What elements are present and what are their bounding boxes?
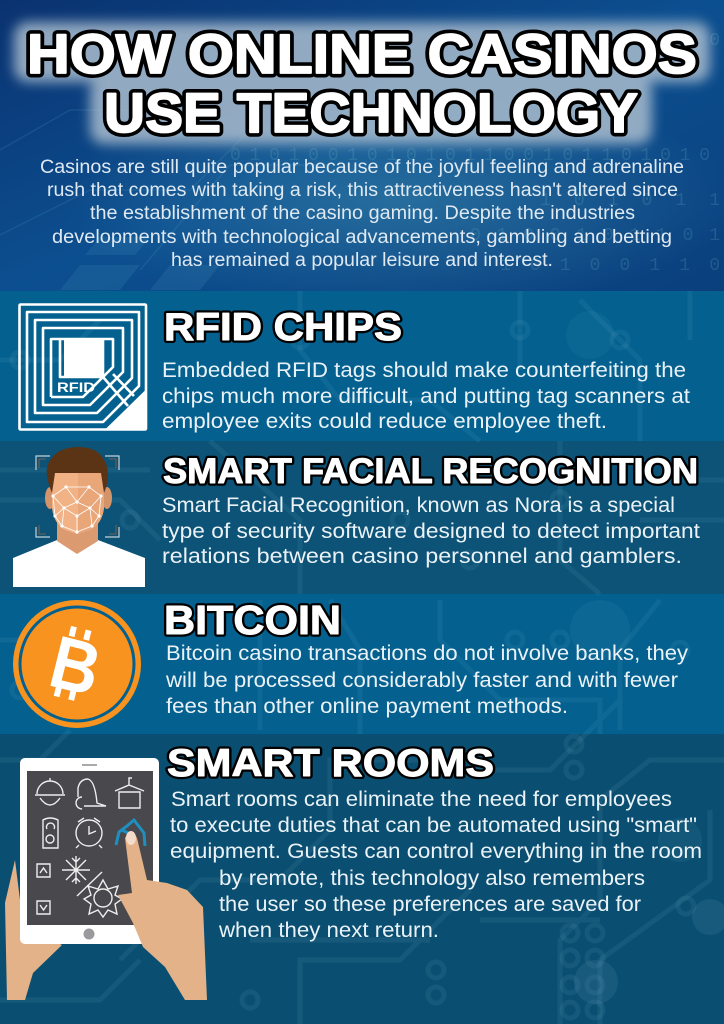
RFID text [162,359,690,433]
band: facial recognition [0,441,724,594]
band: smart rooms [0,734,724,1024]
title: USE TECHNOLOGY [104,81,638,144]
header background: 0 1 0 0 1 0 1 1 0 1 [470,226,720,246]
intro text: has remained a popular leisure and interest. [171,250,553,271]
app icons: up and down [37,864,50,914]
header background: 0101001010101100101101010 [230,146,710,166]
left hand [5,860,62,1000]
icon: tablet with hands [5,758,207,1000]
title [14,22,710,144]
facial recognition text: type of security software designed to detect important [162,520,700,543]
smart rooms heading: SMART ROOMS [167,742,494,785]
RFID text: chips much more difficult, and putting tag scanners at [162,385,690,408]
smart rooms text: Smart rooms can eliminate the need for employees [171,788,672,811]
app icon: clock [76,820,102,846]
facial recognition heading: SMART FACIAL RECOGNITION [163,452,698,491]
icon: RFID tag: RFID [57,380,95,395]
title: HOW ONLINE CASINOS [27,22,697,85]
app icon: sun [94,889,112,907]
circuit pattern [0,291,724,1024]
RFID heading: RFID CHIPS [164,306,402,349]
header background: 1 0 1 0 [600,31,720,51]
bitcoin heading: BITCOIN [164,597,341,643]
RFID text: employee exits could reduce employee theft. [162,410,607,433]
smart rooms text: the user so these preferences are saved for [219,893,641,916]
icon: bitcoin [13,600,141,728]
tablet body [20,758,159,944]
icon: facial recognition [13,447,145,587]
intro text: rush that comes with taking a risk, this attractiveness hasn't altered since [47,180,678,201]
header background: 1 0 1 0 1 1 [540,191,720,211]
app icon: door tag [43,818,58,848]
facial recognition text [162,494,700,568]
intro text [40,157,684,271]
intro text: developments with technological advancements, gambling and betting [52,227,672,248]
app icon: keys [116,820,145,846]
band: bitcoin [0,594,724,734]
band: RFID [0,291,724,441]
app icon: cloche [35,778,65,805]
title: HOW ONLINE CASINOS [27,22,697,85]
shirt [13,540,145,587]
title: USE TECHNOLOGY [104,81,638,144]
facial recognition text: relations between casino personnel and gamblers. [162,545,682,568]
intro text: the establishment of the casino gaming. Despite the industries [90,203,635,224]
app icon: snowflake [62,856,90,884]
smart rooms text: to execute duties that can be automated using "smart" [170,814,697,837]
bitcoin text [165,642,689,718]
app icon: vacuum [76,779,106,809]
intro text: Casinos are still quite popular because of the joyful feeling and adrenaline [40,157,684,178]
bitcoin text: Bitcoin casino transactions do not involve banks, they [166,642,689,665]
facial recognition text: Smart Facial Recognition, known as Nora is a special [162,494,675,517]
bitcoin text: will be processed considerably faster and with fewer [165,669,678,692]
tablet screen [27,771,153,925]
app icon: hanger [115,778,144,808]
RFID heading: RFID CHIPS [164,306,402,349]
icon: RFID tag [20,304,146,430]
bitcoin text: fees than other online payment methods. [166,695,568,718]
header background [0,0,724,310]
title glow [14,22,710,144]
icon: bitcoin: B [42,620,109,712]
hair [47,447,108,493]
pointing hand [118,832,207,1000]
RFID text: Embedded RFID tags should make counterfeiting the [162,359,686,382]
bitcoin heading: BITCOIN [164,597,341,643]
smart rooms heading: SMART ROOMS [167,742,494,785]
smart rooms text: equipment. Guests can control everything in the room [170,840,702,863]
facial recognition heading: SMART FACIAL RECOGNITION [163,452,698,491]
smart rooms text: by remote, this technology also remembers [219,867,645,890]
smart rooms text: when they next return. [218,919,439,942]
header background: 1 0 1 0 0 1 1 0 [500,256,720,276]
smart rooms text [170,788,702,942]
